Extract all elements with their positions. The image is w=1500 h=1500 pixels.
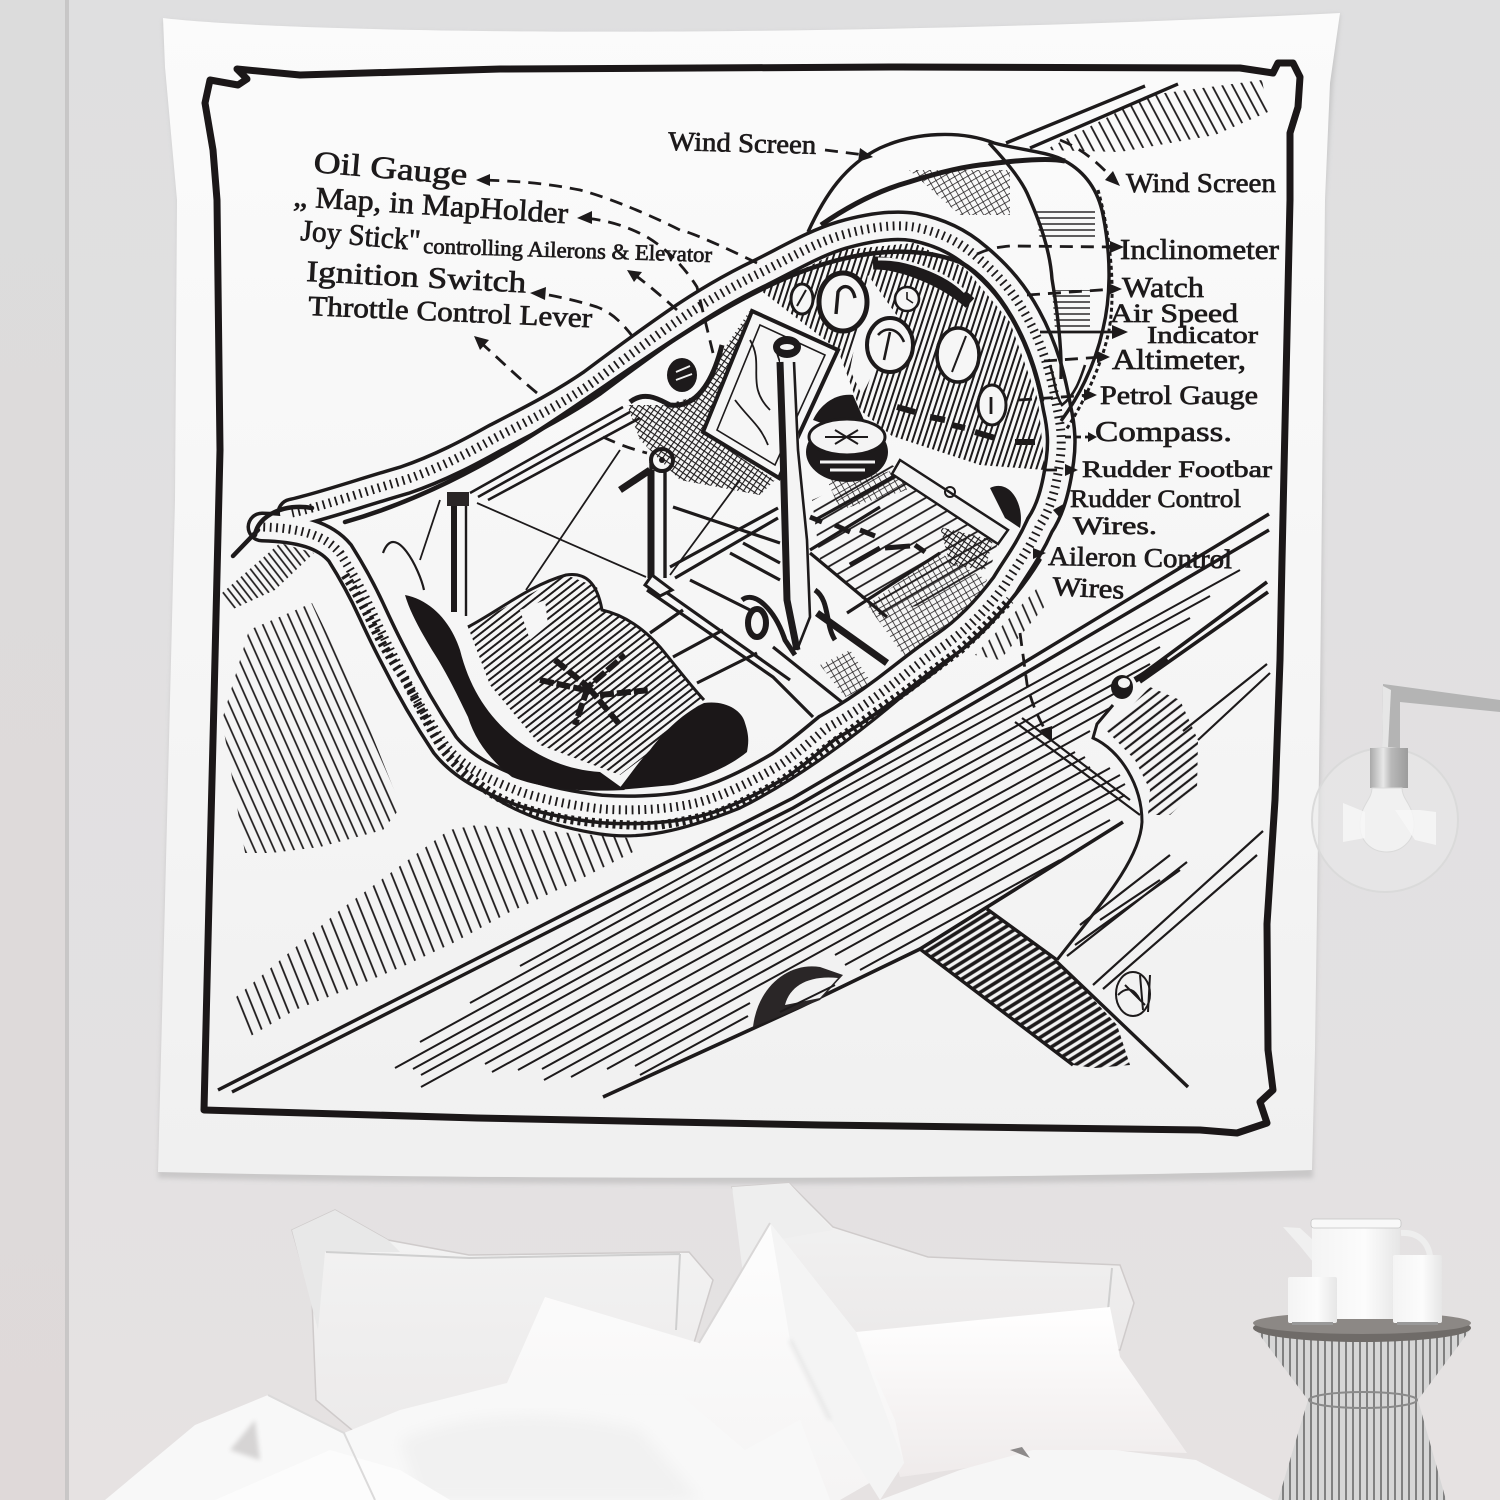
- arrow heads: [474, 148, 1128, 742]
- label: compass: Compass.: [1095, 416, 1232, 448]
- right duvet: [880, 1450, 1273, 1500]
- arrow: compass: [1065, 436, 1090, 438]
- rudder footbar: [892, 460, 1021, 544]
- inclinometer: [873, 259, 970, 303]
- arrow: altimeter: [1044, 357, 1103, 361]
- tapestry artwork: [204, 63, 1300, 1133]
- wing trailing edge: [603, 582, 1268, 1097]
- label: indicator: Indicator: [1147, 323, 1258, 349]
- bolt on wing: [1111, 660, 1168, 699]
- arrow: map holder: [585, 218, 713, 353]
- cross hatched bracket zone: [627, 310, 775, 495]
- teapot lid: [1311, 1219, 1401, 1228]
- tapestry cloth: [158, 13, 1340, 1184]
- arrow: lever lower: [603, 437, 647, 453]
- bulb reflection: [1343, 803, 1436, 845]
- back left pillow: [292, 1210, 713, 1470]
- cockpit struts and bracing wires: [383, 407, 740, 616]
- back right pillow: [732, 1183, 1134, 1350]
- arrow: oil gauge: [482, 180, 757, 263]
- seat black front roll: [618, 702, 748, 790]
- central folded sheet: [480, 1223, 904, 1500]
- dial petrol gauge: [978, 385, 1006, 425]
- inner bulb: [1360, 788, 1414, 852]
- label: rudder control: Rudder Control: [1070, 486, 1241, 513]
- lamp socket: [1370, 748, 1408, 788]
- floor dashes: [810, 517, 925, 565]
- arrow: ignition switch: [538, 293, 633, 337]
- wing leading edge: [218, 514, 1269, 1092]
- wing strut: [920, 909, 1188, 1087]
- floor lamp: [1312, 684, 1500, 892]
- control column with pivot: [620, 449, 673, 596]
- label: oil gauge: Oil Gauge: [312, 144, 469, 192]
- seat black back: [405, 595, 625, 791]
- cockpit floor: [647, 465, 1000, 717]
- wing blister: [753, 966, 843, 1027]
- compass: [806, 419, 888, 482]
- dial oil gauge: [819, 273, 867, 331]
- pillow shadow: [1010, 1447, 1030, 1458]
- right cup: [1393, 1255, 1442, 1325]
- label: rudder footbar: Rudder Footbar: [1082, 457, 1272, 482]
- front duvet: [105, 1383, 830, 1500]
- dark shape under panel: [813, 395, 864, 428]
- dial altimeter: [937, 328, 979, 382]
- arrow: air speed: [1040, 331, 1118, 333]
- seat cushion outline: [468, 574, 704, 700]
- signature: [1116, 972, 1150, 1016]
- panel lower dashes: [897, 407, 1035, 442]
- lamp arm: [1382, 684, 1500, 748]
- arrow: joy stick: [632, 273, 677, 310]
- floor frame rails: [647, 470, 940, 717]
- strut bracket: [447, 492, 469, 506]
- rim outer band line: [480, 560, 1040, 836]
- side table with wire body: [1253, 1312, 1471, 1500]
- fuselage hatching: lower band: [236, 825, 637, 1037]
- wing cutout line and flap: [1015, 705, 1142, 960]
- label: aileron wires: Wires: [1052, 571, 1125, 605]
- hatching under rim on right: [975, 585, 1046, 660]
- label: ignition switch: Ignition Switch: [306, 255, 527, 300]
- lamp arm highlight: [1382, 686, 1391, 748]
- dashed leader arrows: [480, 140, 1118, 738]
- curved wing root: [1057, 705, 1142, 960]
- arrow: inclinometer: [977, 246, 1115, 254]
- teapot spout: [1283, 1227, 1313, 1262]
- teapot body: [1312, 1227, 1400, 1319]
- rim dark teeth: [345, 575, 1010, 825]
- label: map: „ Map, in MapHolder: [293, 180, 569, 230]
- arrow: aileron wires: [1020, 633, 1050, 738]
- seat buttons: [540, 655, 650, 725]
- fuselage hatching: left side: [222, 543, 401, 853]
- joystick: [773, 336, 810, 650]
- fuselage hatching: top right cowling: [1006, 80, 1268, 152]
- label: aileron control: Aileron Control: [1048, 541, 1232, 574]
- rim inner heavy line: [345, 252, 1042, 522]
- table waist ring: [1309, 1392, 1417, 1408]
- pedal ring: [742, 590, 835, 655]
- cockpit rim: [233, 226, 1061, 836]
- seat back white patch: [520, 600, 548, 640]
- arrow: petrol: [1019, 395, 1090, 400]
- arrow: footbar: [1044, 469, 1072, 471]
- arrow: throttle lever: [480, 342, 537, 393]
- wing planks: [218, 514, 1269, 1097]
- right wing root hatching: [1067, 664, 1270, 989]
- seat: [405, 574, 748, 791]
- label: wind screen right: Wind Screen: [1126, 168, 1277, 198]
- hand drawn border frame: [204, 63, 1300, 1133]
- wall corner band: [0, 0, 69, 1500]
- instrument panel: [760, 243, 1045, 470]
- wing plank lines: [395, 570, 1240, 1087]
- dial small left: [791, 284, 813, 314]
- table wire body: [1256, 1330, 1470, 1500]
- rim scroll tail: [233, 507, 312, 556]
- panel white gap: [850, 275, 900, 395]
- left cup: [1288, 1277, 1337, 1325]
- label: wind screen top: Wind Screen: [668, 126, 817, 160]
- table top: [1253, 1312, 1471, 1342]
- label: throttle control lever: Throttle Control Lever: [308, 291, 594, 334]
- front right pillow: [856, 1307, 1187, 1477]
- arrow: wind screen top: [825, 150, 865, 155]
- ignition switch bracket and knob: [630, 345, 722, 405]
- watch: [895, 287, 919, 311]
- label: joy stick: Joy Stick": [299, 214, 422, 257]
- label: altimeter: Altimeter,: [1112, 345, 1246, 376]
- arrow: watch: [1027, 289, 1115, 295]
- label: controlling ailerons: controlling Ailerons & Elevator: [423, 233, 713, 267]
- label: petrol gauge: Petrol Gauge: [1100, 381, 1258, 410]
- seat cushion hatching: [468, 575, 704, 775]
- label: watch: Watch: [1122, 272, 1205, 304]
- arrow: wind screen right: [1060, 140, 1116, 182]
- dial air speed: [867, 318, 913, 372]
- glass globe: [1312, 748, 1458, 892]
- teapot handle: [1401, 1233, 1430, 1256]
- label: rudder wires: Wires.: [1073, 513, 1157, 540]
- label: inclinometer: Inclinometer: [1120, 234, 1279, 266]
- wind screen: [808, 134, 1112, 430]
- map in map holder: [703, 311, 838, 478]
- label: air speed: Air Speed: [1110, 299, 1238, 328]
- tea set: [1283, 1219, 1442, 1325]
